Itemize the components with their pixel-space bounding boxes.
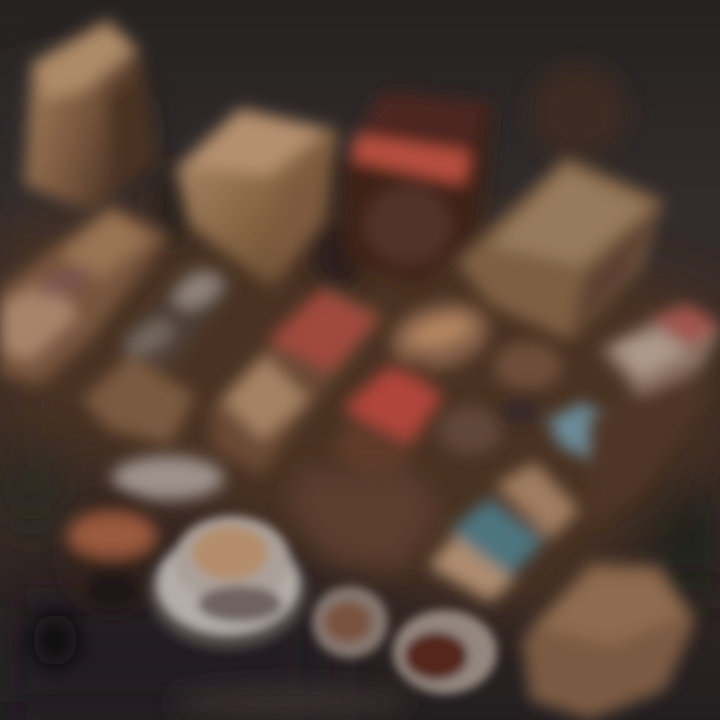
package: large kraft box right: [456, 156, 664, 340]
package: red label pack lower centre: [330, 360, 445, 485]
shadow: dark gaps behind the upper packages: [152, 165, 364, 289]
package: tan and teal pack lower right: [428, 462, 580, 602]
cup: white bowl with dark coffee bottom: [393, 610, 497, 694]
dark object: bottom left spoon: [33, 614, 410, 718]
package: small tan pack right centre: [438, 342, 562, 454]
package: blue label pack right: [500, 402, 624, 462]
package: large kraft bag bottom right: [522, 562, 696, 720]
package: kraft box upper centre-left: [176, 108, 338, 288]
cup: small bowl centre bottom: [312, 586, 388, 658]
package: kraft packs left: [0, 205, 170, 385]
cup: coffee cup with orange coffee at left: [62, 497, 162, 613]
saucer: white plate behind cup: [112, 456, 224, 500]
package: dark bag in background: [530, 66, 626, 158]
cup: white cup and saucer in foreground: [148, 516, 308, 650]
package: orange pack centre: [383, 292, 497, 380]
package: red label pack centre: [210, 285, 385, 475]
package: dark brown bag with red band: [340, 90, 494, 285]
package: white and red label pack far right: [590, 305, 720, 525]
package: kraft pack lower centre: [290, 470, 440, 570]
package: tall kraft bag top left: [24, 18, 158, 212]
package: grey and white label packs centre-left: [82, 264, 235, 445]
